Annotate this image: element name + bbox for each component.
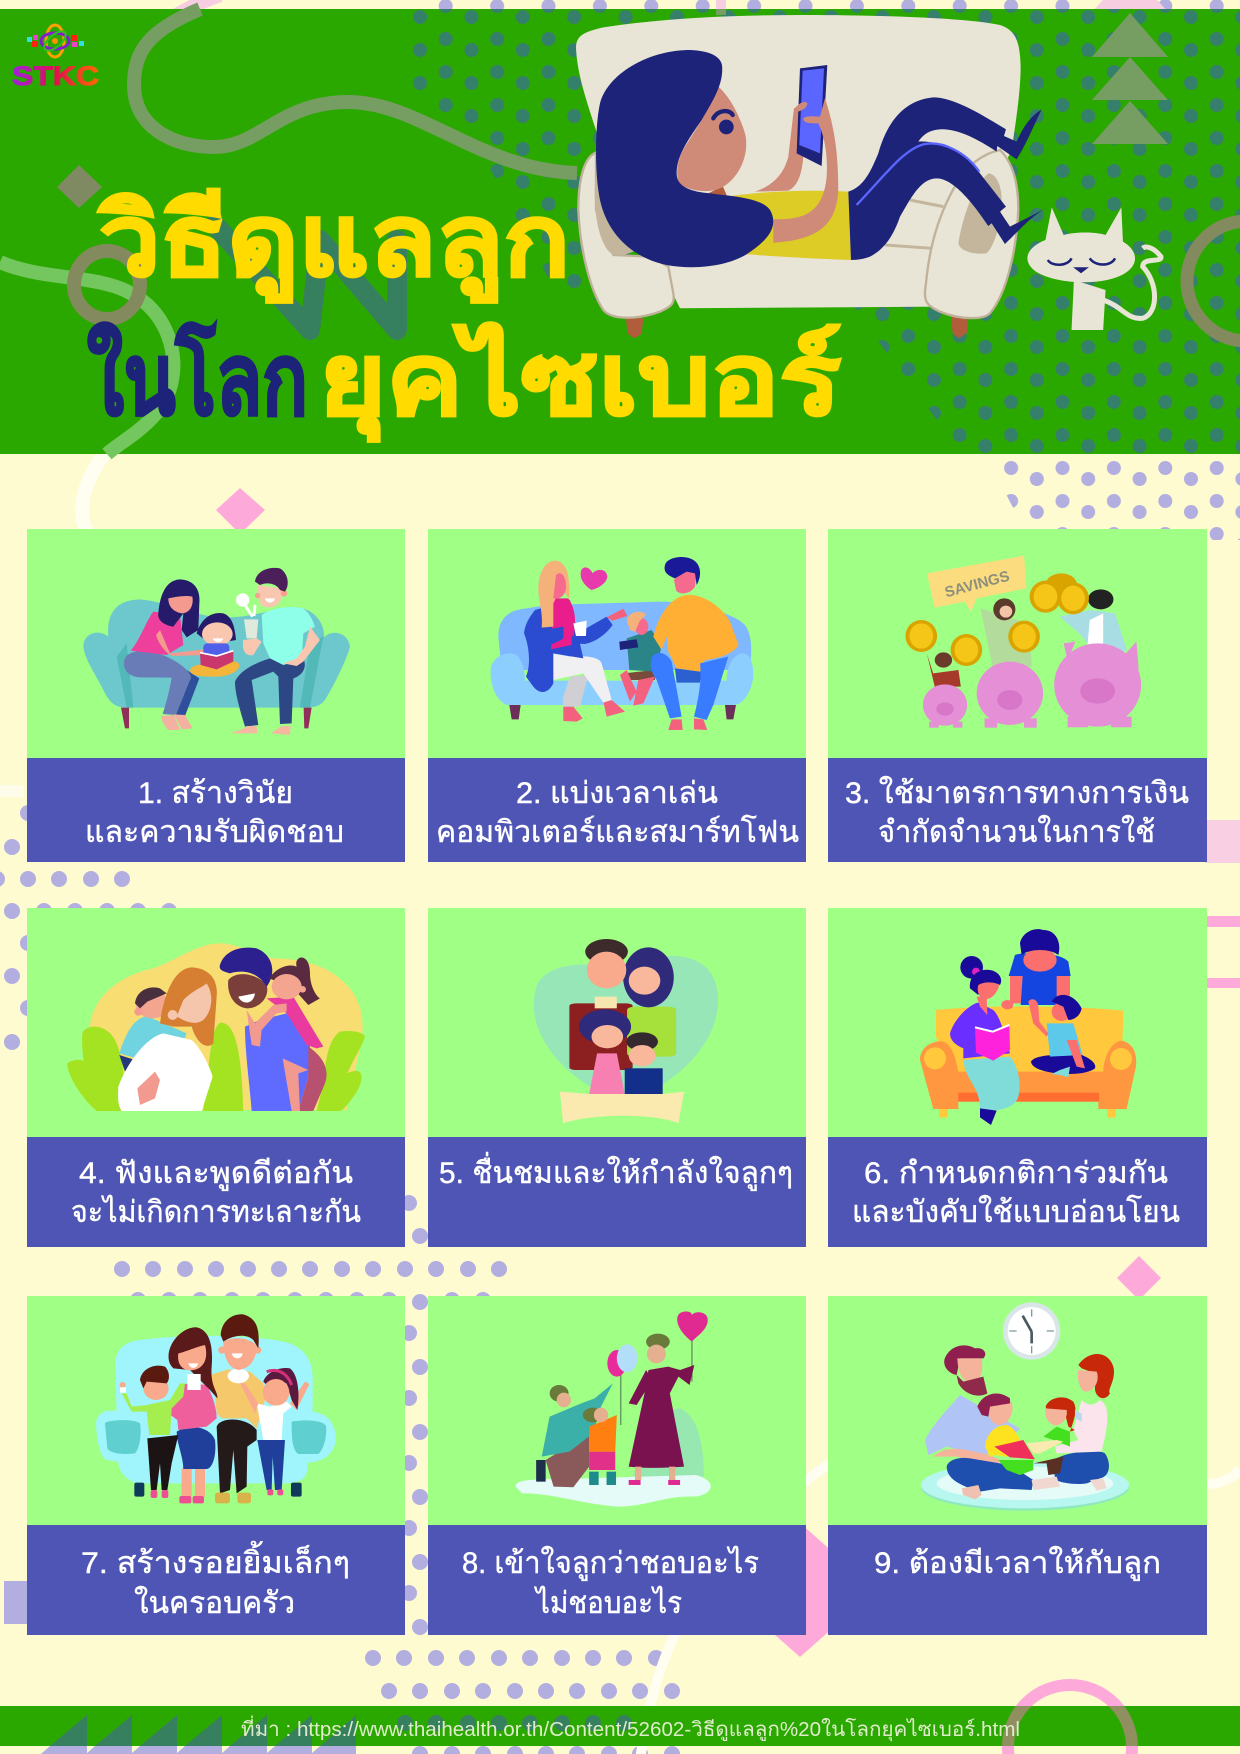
caption 6: [852, 1157, 1180, 1229]
illustration: family with balloons: [516, 1312, 711, 1507]
header band: [0, 9, 1240, 454]
trousers: [848, 97, 1046, 260]
title line 2 yellow: ยุคไซเบอร์: [319, 323, 841, 442]
source text: ที่มา : https://www.thaihealth.or.th/Content/52602-วิธีดูแลลูก%20ในโลกยุคไซเบอร์.html: [241, 1715, 1020, 1742]
sofa right arm: [925, 150, 1018, 318]
illustration: family on teal sofa: [83, 568, 350, 735]
panel: card 3: [828, 529, 1207, 862]
rear arm: [755, 105, 803, 192]
caption 7: [81, 1541, 350, 1620]
illustration: family reading on orange sofa: [920, 929, 1136, 1125]
panel: card 4: [27, 908, 405, 1247]
caption 2: 2. แบ่งเวลาเล่น: [516, 777, 718, 810]
footer band: [0, 1706, 1240, 1754]
left cushion shade: [595, 177, 637, 255]
illustration: smiling family on sofa: [96, 1314, 336, 1503]
panel: card 1: [27, 529, 405, 862]
banner text: SAVINGS: [943, 568, 1011, 601]
sofa back: [576, 15, 1021, 308]
caption 3: 3. ใช้มาตรการทางการเงิน: [845, 776, 1189, 810]
illustration: family in heart: [534, 939, 718, 1123]
illustration: family saving with piggy banks: [905, 556, 1141, 728]
caption 4: จะไม่เกิดการทะเลาะกัน: [71, 1194, 361, 1229]
panel: card 6: [828, 908, 1207, 1247]
panel: card 8: [428, 1296, 806, 1635]
caption 9: 9. ต้องมีเวลาให้กับลูก: [874, 1546, 1161, 1581]
sofa left arm: [578, 153, 674, 318]
logo: STKC: [12, 25, 99, 91]
title: [87, 185, 841, 442]
illustration: parents carrying children: [67, 943, 365, 1111]
caption 5: 5. ชื่นชมและให้กำลังใจลูกๆ: [439, 1152, 793, 1191]
sofa legs: [626, 317, 968, 338]
caption 2: [436, 777, 799, 849]
triangles below footer: [41, 1746, 356, 1754]
caption 8: ไม่ชอบอะไร: [534, 1585, 682, 1620]
panel: card 5: [428, 908, 806, 1247]
title line 1: วิธีดูแลลูก: [97, 185, 570, 303]
illustration: parents with child on blue sofa: [491, 557, 753, 730]
fingers and front arm: [795, 102, 807, 112]
shirt: [727, 191, 851, 260]
panel: card 2: [428, 529, 806, 862]
illustration: white cat: [1027, 207, 1161, 330]
caption 7: ในครอบครัว: [134, 1586, 295, 1620]
illustration: woman on sofa with tablet: [576, 15, 1046, 338]
caption 1: 1. สร้างวินัย: [138, 777, 293, 810]
face: [677, 87, 746, 191]
caption 1: และความรับผิดชอบ: [85, 816, 344, 849]
hair: [596, 50, 773, 267]
seat rails: [885, 200, 943, 248]
caption 6: และบังคับใช้แบบอ่อนโยน: [852, 1194, 1180, 1229]
caption 2: คอมพิวเตอร์และสมาร์ทโฟน: [436, 814, 799, 849]
caption 3: [845, 776, 1189, 849]
logo: STKC: STKC: [12, 61, 99, 91]
caption 3: จำกัดจำนวนในการใช้: [878, 815, 1155, 849]
panel: card 7: [27, 1296, 405, 1635]
neck: [708, 186, 727, 197]
caption 4: [71, 1157, 361, 1229]
caption 8: [462, 1545, 759, 1620]
caption 4: 4. ฟังและพูดดีต่อกัน: [79, 1157, 353, 1191]
panel: card 9: [828, 1296, 1207, 1635]
caption 8: 8. เข้าใจลูกว่าชอบอะไร: [462, 1545, 759, 1581]
tablet: [797, 65, 827, 166]
illustration: family reading with clock: [921, 1302, 1129, 1511]
caption 6: 6. กำหนดกติการ่วมกัน: [864, 1157, 1168, 1190]
title line 2 navy: ในโลก: [87, 321, 308, 436]
caption 7: 7. สร้างรอยยิ้มเล็กๆ: [81, 1541, 350, 1580]
caption 1: [85, 777, 344, 849]
